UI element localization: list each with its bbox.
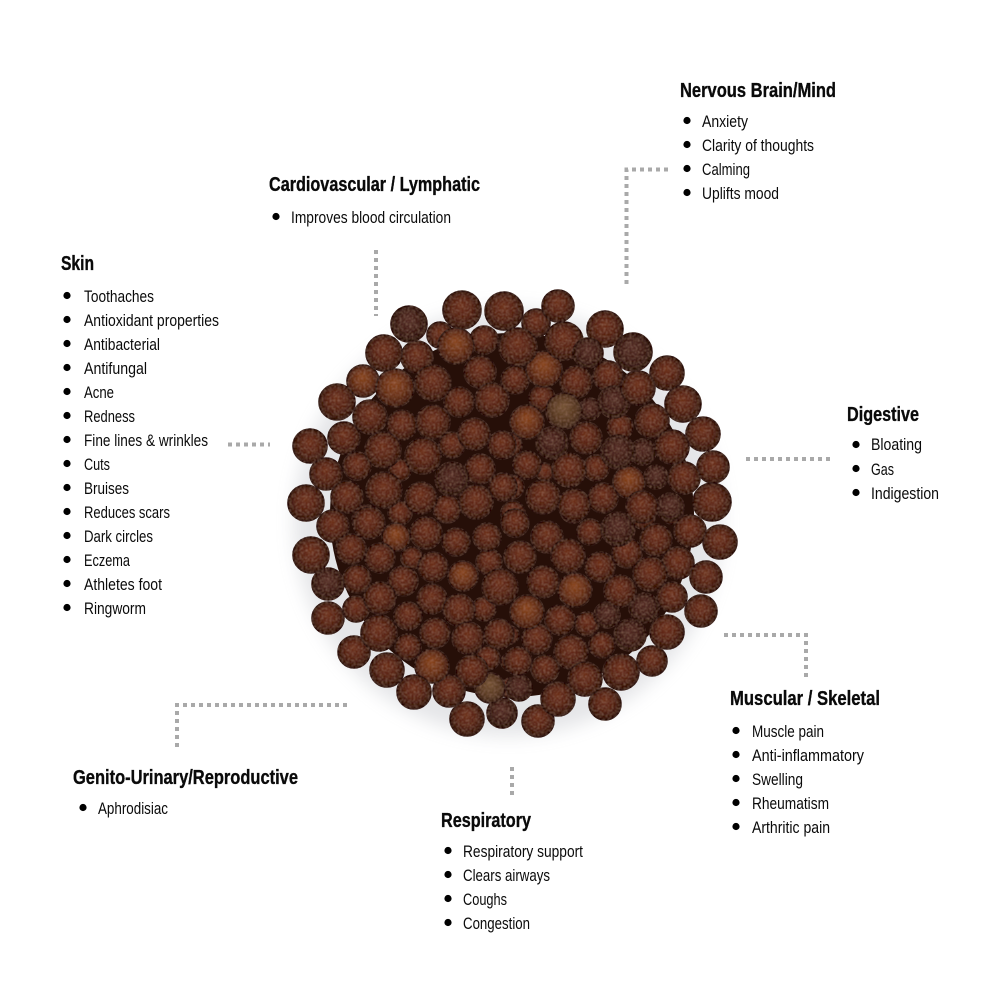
list: Indigestion [871,484,939,503]
heading: Muscular / Skeletal [730,688,880,710]
heading: Skin [61,253,94,275]
panel: genito-urinary / reproductive [73,767,298,818]
list: Respiratory support [463,842,583,861]
list [732,722,864,837]
list: Rheumatism [752,794,829,813]
list: Dark circles [84,527,153,546]
list: Fine lines & wrinkles [84,431,208,450]
list: Clears airways [463,866,550,885]
list: Uplifts mood [702,184,779,203]
heading: Cardiovascular / Lymphatic [269,174,480,196]
list: Reduces scars [84,503,170,522]
berry pile [288,290,737,737]
list: Swelling [752,770,803,789]
list: Gas [871,460,894,479]
list: Antioxidant properties [84,311,219,330]
list [444,842,583,933]
list: Calming [702,160,750,179]
heading: Genito-Urinary/Reproductive [73,767,298,789]
heading: Respiratory [441,810,532,832]
list: Bloating [871,435,922,454]
connector: cardiovascular [374,250,378,316]
panel: skin [61,253,219,618]
heading: Digestive [847,404,919,426]
panel: muscular / skeletal [730,688,880,837]
list: Cuts [84,455,110,474]
list: Anxiety [702,112,748,131]
list: Acne [84,383,114,402]
heading: Nervous Brain/Mind [680,80,836,102]
list [852,435,939,503]
connector: muscular / skeletal [724,635,806,677]
list: Eczema [84,551,130,570]
list: Athletes foot [84,575,162,594]
list: Clarity of thoughts [702,136,814,155]
list: Redness [84,407,135,426]
list [79,799,168,818]
list: Anti-inflammatory [752,746,864,765]
list: Congestion [463,914,530,933]
connector: genito-urinary [177,705,347,747]
list: Bruises [84,479,129,498]
list [683,112,814,203]
list: Toothaches [84,287,154,306]
connector: respiratory [510,767,514,799]
connector: digestive [746,457,832,461]
list: Antibacterial [84,335,160,354]
list: Muscle pain [752,722,824,741]
panel: digestive [847,404,939,503]
list: Antifungal [84,359,147,378]
list: Improves blood circulation [291,208,451,227]
list: Ringworm [84,599,146,618]
panel: cardiovascular / lymphatic [269,174,480,227]
list: Coughs [463,890,507,909]
panel: respiratory [441,810,583,933]
list: Aphrodisiac [98,799,168,818]
connector: nervous brain/mind [626,170,668,286]
connector: skin [228,442,270,446]
list: Arthritic pain [752,818,830,837]
list [63,287,219,618]
panel: nervous brain/mind [680,80,836,203]
